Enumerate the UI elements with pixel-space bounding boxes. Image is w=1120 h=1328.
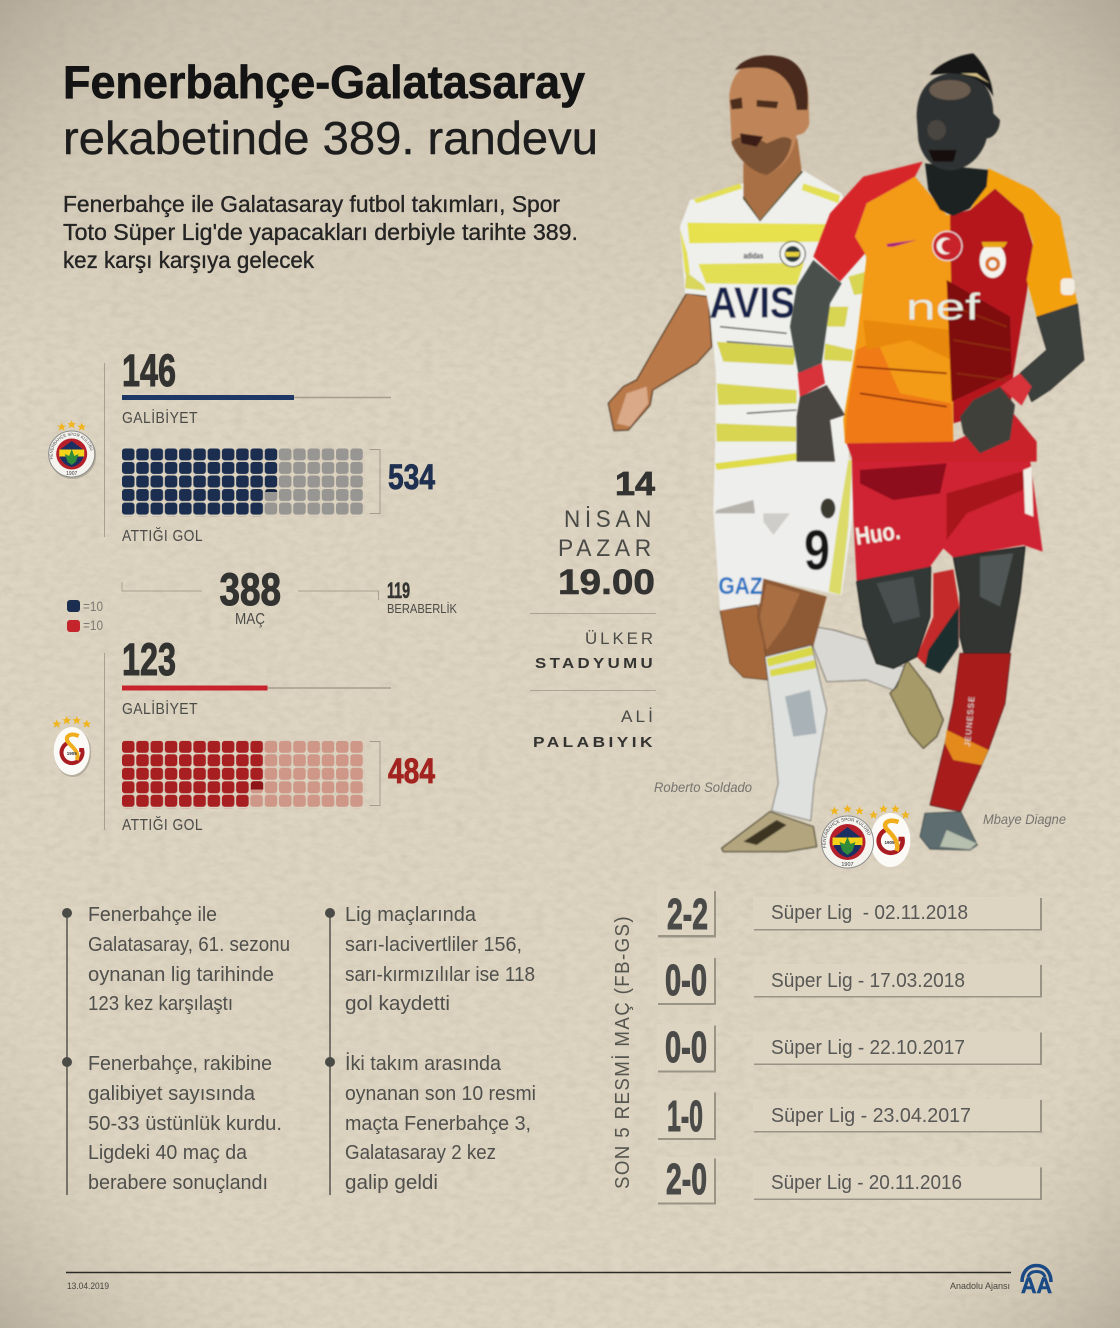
fact: league wins: Fenerbahçe, rakibine [88,1053,272,1075]
goals bracket [370,742,380,806]
match row 1: 2-2 [667,890,708,939]
match row 1: Süper Lig - 02.11.2018 [771,902,968,924]
Fenerbahçe wins number: 146 [122,345,176,396]
fact: last ten matches: İki takım arasında [345,1052,502,1075]
diagne upper body [790,53,1084,462]
referee: PALABIYIK [533,734,656,751]
illustration: Roberto Soldado [608,55,943,852]
goals number 484: 484 [388,752,435,791]
intro text: Fenerbahçe ile Galatasaray futbol takımları, Spor [63,191,560,217]
stadium: ÜLKER [585,629,656,648]
legend: =10 [83,617,103,633]
match row 2: 0-0 [665,956,707,1005]
match row 3 [657,1023,1042,1072]
match row 4: Süper Lig - 23.04.2017 [771,1105,971,1127]
total matches number: 388 [220,564,281,615]
match row 3: Süper Lig - 22.10.2017 [771,1037,965,1059]
icon: Fenerbahçe crest [48,420,96,479]
wins label: GALİBİYET [122,699,198,718]
soldado upper body: AVIS [709,278,795,327]
soldado upper body: adidas [743,251,764,260]
match row 5 [657,1155,1042,1204]
fact: league goals [345,904,535,1015]
fact: 61 seasons: Fenerbahçe ile [88,904,217,926]
fact: last ten matches [345,1052,536,1194]
match row 3: 0-0 [665,1023,707,1072]
soldado upper body [608,55,867,462]
Galatasaray wins number: 123 [122,634,176,685]
player name: Mbaye Diagne: Mbaye Diagne [983,811,1066,827]
icon: Galatasaray crest: 1905 [67,751,77,756]
last five matches heading: SON 5 RESMİ MAÇ (FB-GS) [611,915,634,1189]
Galatasaray crest small: 1905 [884,840,895,845]
match row 2: Süper Lig - 17.03.2018 [771,970,965,992]
icon: Fenerbahçe crest: 1907 [66,471,77,477]
referee: ALİ [621,707,656,726]
match row 5: Süper Lig - 20.11.2016 [771,1172,962,1194]
total matches label: MAÇ [235,611,265,628]
title: Fenerbahçe-Galatasaray [63,56,585,108]
fact: last ten matches: oynanan son 10 resmi [345,1083,536,1105]
fact: last ten matches: galip geldi [345,1172,438,1194]
soldado lower body [713,448,943,852]
goals bracket [370,450,380,514]
fact: league wins [88,1053,282,1194]
match info block [530,465,656,751]
stadium [535,629,656,672]
Fenerbahçe wins bar [122,395,391,400]
illustration: Mbaye Diagne [790,53,1084,850]
fact: 61 seasons: 123 kez karşılaştı [88,993,233,1015]
diagne lower body: JEUNESSE [963,696,976,747]
soldado lower body: 9 [804,519,830,582]
legend: =10 [83,598,103,614]
fact: last ten matches: maçta Fenerbahçe 3, [345,1113,531,1135]
footer credit: Anadolu Ajansı [950,1281,1010,1292]
goals label: ATTIĞI GOL [122,815,203,834]
wins label: GALİBİYET [122,408,198,427]
fact: 61 seasons: oynanan lig tarihinde [88,964,274,986]
icon: Galatasaray crest [52,716,91,777]
Galatasaray wins bar [122,686,391,690]
fact: league wins: 50-33 üstünlük kurdu. [88,1113,282,1135]
icon: Anadolu Ajansı logo: AA [1021,1273,1052,1298]
diagne lower body [852,448,1043,850]
icon: Fenerbahçe crest: FENERBAHÇE SPOR KULÜBÜ [50,432,94,460]
intro text [63,191,578,273]
fact: league goals: Lig maçlarında [345,904,477,926]
soldado lower body: GAZ [718,573,763,600]
facts column 2 [325,904,536,1195]
match row 4: 1-0 [667,1092,703,1141]
title [63,56,598,164]
goals grid: 484 [122,741,365,808]
intro text: Toto Süper Lig'de yapacakları derbiyle tarihte 389. [63,219,578,245]
goals number 534: 534 [388,458,435,497]
draws number: 119 [387,578,410,603]
footer [66,1266,1052,1298]
Fenerbahçe crest small [821,804,874,868]
fact: 61 seasons [88,904,290,1015]
diagne lower body: Huo. [854,518,902,551]
match date: 14 [615,465,656,502]
fact: 61 seasons: Galatasaray, 61. sezonu [88,934,290,956]
facts column 1 [62,904,290,1195]
match row 2 [657,956,1042,1005]
diagne upper body: nef [906,285,981,327]
fact: league goals: sarı-kırmızılılar ise 118 [345,964,535,986]
footer date: 13.04.2019 [67,1281,109,1292]
legend [67,598,103,633]
match row 1 [657,890,1042,939]
Fenerbahçe crest small: 1907 [841,862,854,868]
goals grid: 534 [122,448,365,516]
stadium: STADYUMU [535,655,656,672]
match row 5: 2-0 [666,1155,707,1204]
panel: Fenerbahçe stats [104,345,435,545]
player name: Roberto Soldado: Roberto Soldado [654,779,752,795]
last five matches list [657,890,1042,1204]
Fenerbahçe crest small: FENERBAHÇE SPOR KULÜBÜ [822,818,872,848]
draws label: BERABERLİK [387,601,457,616]
match date: NİSAN [564,506,656,533]
match row 4 [657,1091,1042,1141]
fact: league wins: Ligdeki 40 maç da [88,1142,248,1164]
referee [533,707,656,751]
fact: league wins: berabere sonuçlandı [88,1172,268,1194]
panel: Galatasaray stats [104,634,435,834]
goals label: ATTIĞI GOL [122,526,203,545]
match date [558,465,656,602]
fact: league wins: galibiyet sayısında [88,1083,256,1105]
match date: 19.00 [558,563,655,602]
match date: PAZAR [558,535,656,562]
panel: match totals [122,564,457,628]
icon: club crests pair [821,804,910,868]
title: rekabetinde 389. randevu [63,112,598,164]
fact: last ten matches: Galatasaray 2 kez [345,1142,496,1164]
intro text: kez karşı karşıya gelecek [63,247,314,273]
fact: league goals: gol kaydetti [345,993,450,1015]
fact: league goals: sarı-lacivertliler 156, [345,934,522,956]
